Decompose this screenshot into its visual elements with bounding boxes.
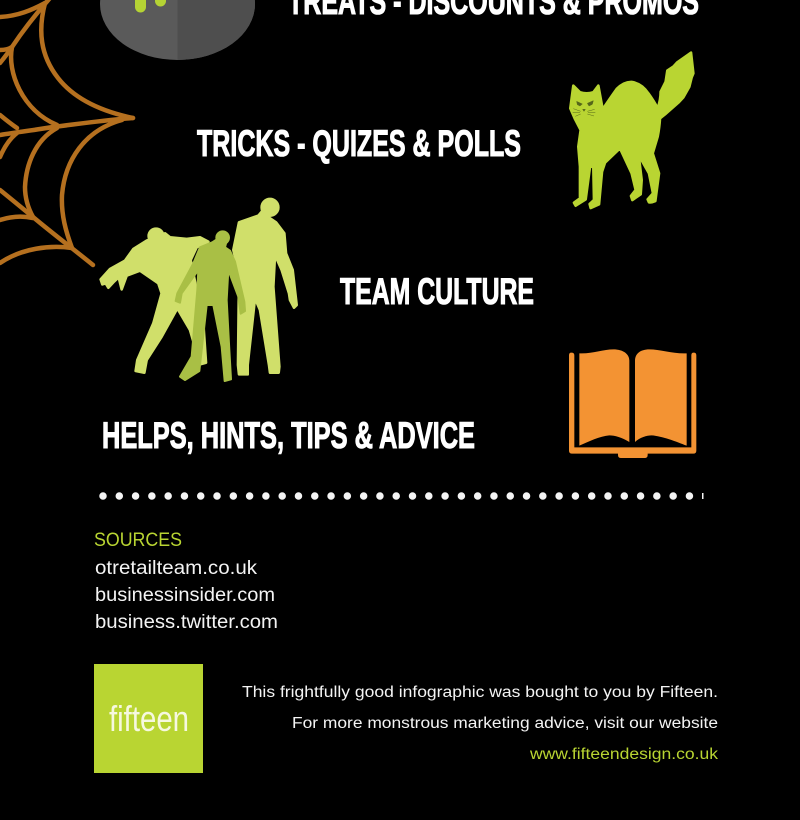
advice line: For more monstrous marketing advice, visit our website: [292, 715, 718, 732]
logo: fifteen: fifteen: [109, 698, 189, 739]
heading: helps hints tips advice: HELPS, HINTS, TIPS & ADVICE: [102, 415, 475, 456]
zombie: left: [101, 229, 208, 373]
heading: tricks: TRICKS - QUIZES & POLLS: [197, 123, 521, 164]
source: otretailteam: otretailteam.co.uk: [95, 558, 258, 579]
sources block: [94, 530, 278, 633]
icon: zombies: [101, 199, 297, 381]
sources heading: SOURCES: [94, 530, 182, 551]
source: twitter: business.twitter.com: [95, 612, 278, 633]
icon: cat: [570, 53, 693, 208]
credit line: This frightfully good infographic was bought to you by Fifteen.: [242, 684, 718, 701]
cat face: [573, 101, 595, 116]
logo: fifteen: [94, 664, 203, 773]
dotted divider: [103, 493, 704, 499]
zombie: middle: [176, 231, 245, 381]
heading: team culture: TEAM CULTURE: [340, 271, 534, 312]
icon: open book: [569, 349, 696, 458]
green slime drips: [135, 0, 166, 12]
website link: www.fifteendesign.co.uk: [529, 746, 718, 763]
footer credit: [242, 684, 718, 763]
zombie: right: [233, 199, 297, 374]
icon: cauldron: [100, 0, 255, 60]
source: businessinsider: businessinsider.com: [95, 585, 275, 606]
icon: spider web: [0, 0, 133, 265]
